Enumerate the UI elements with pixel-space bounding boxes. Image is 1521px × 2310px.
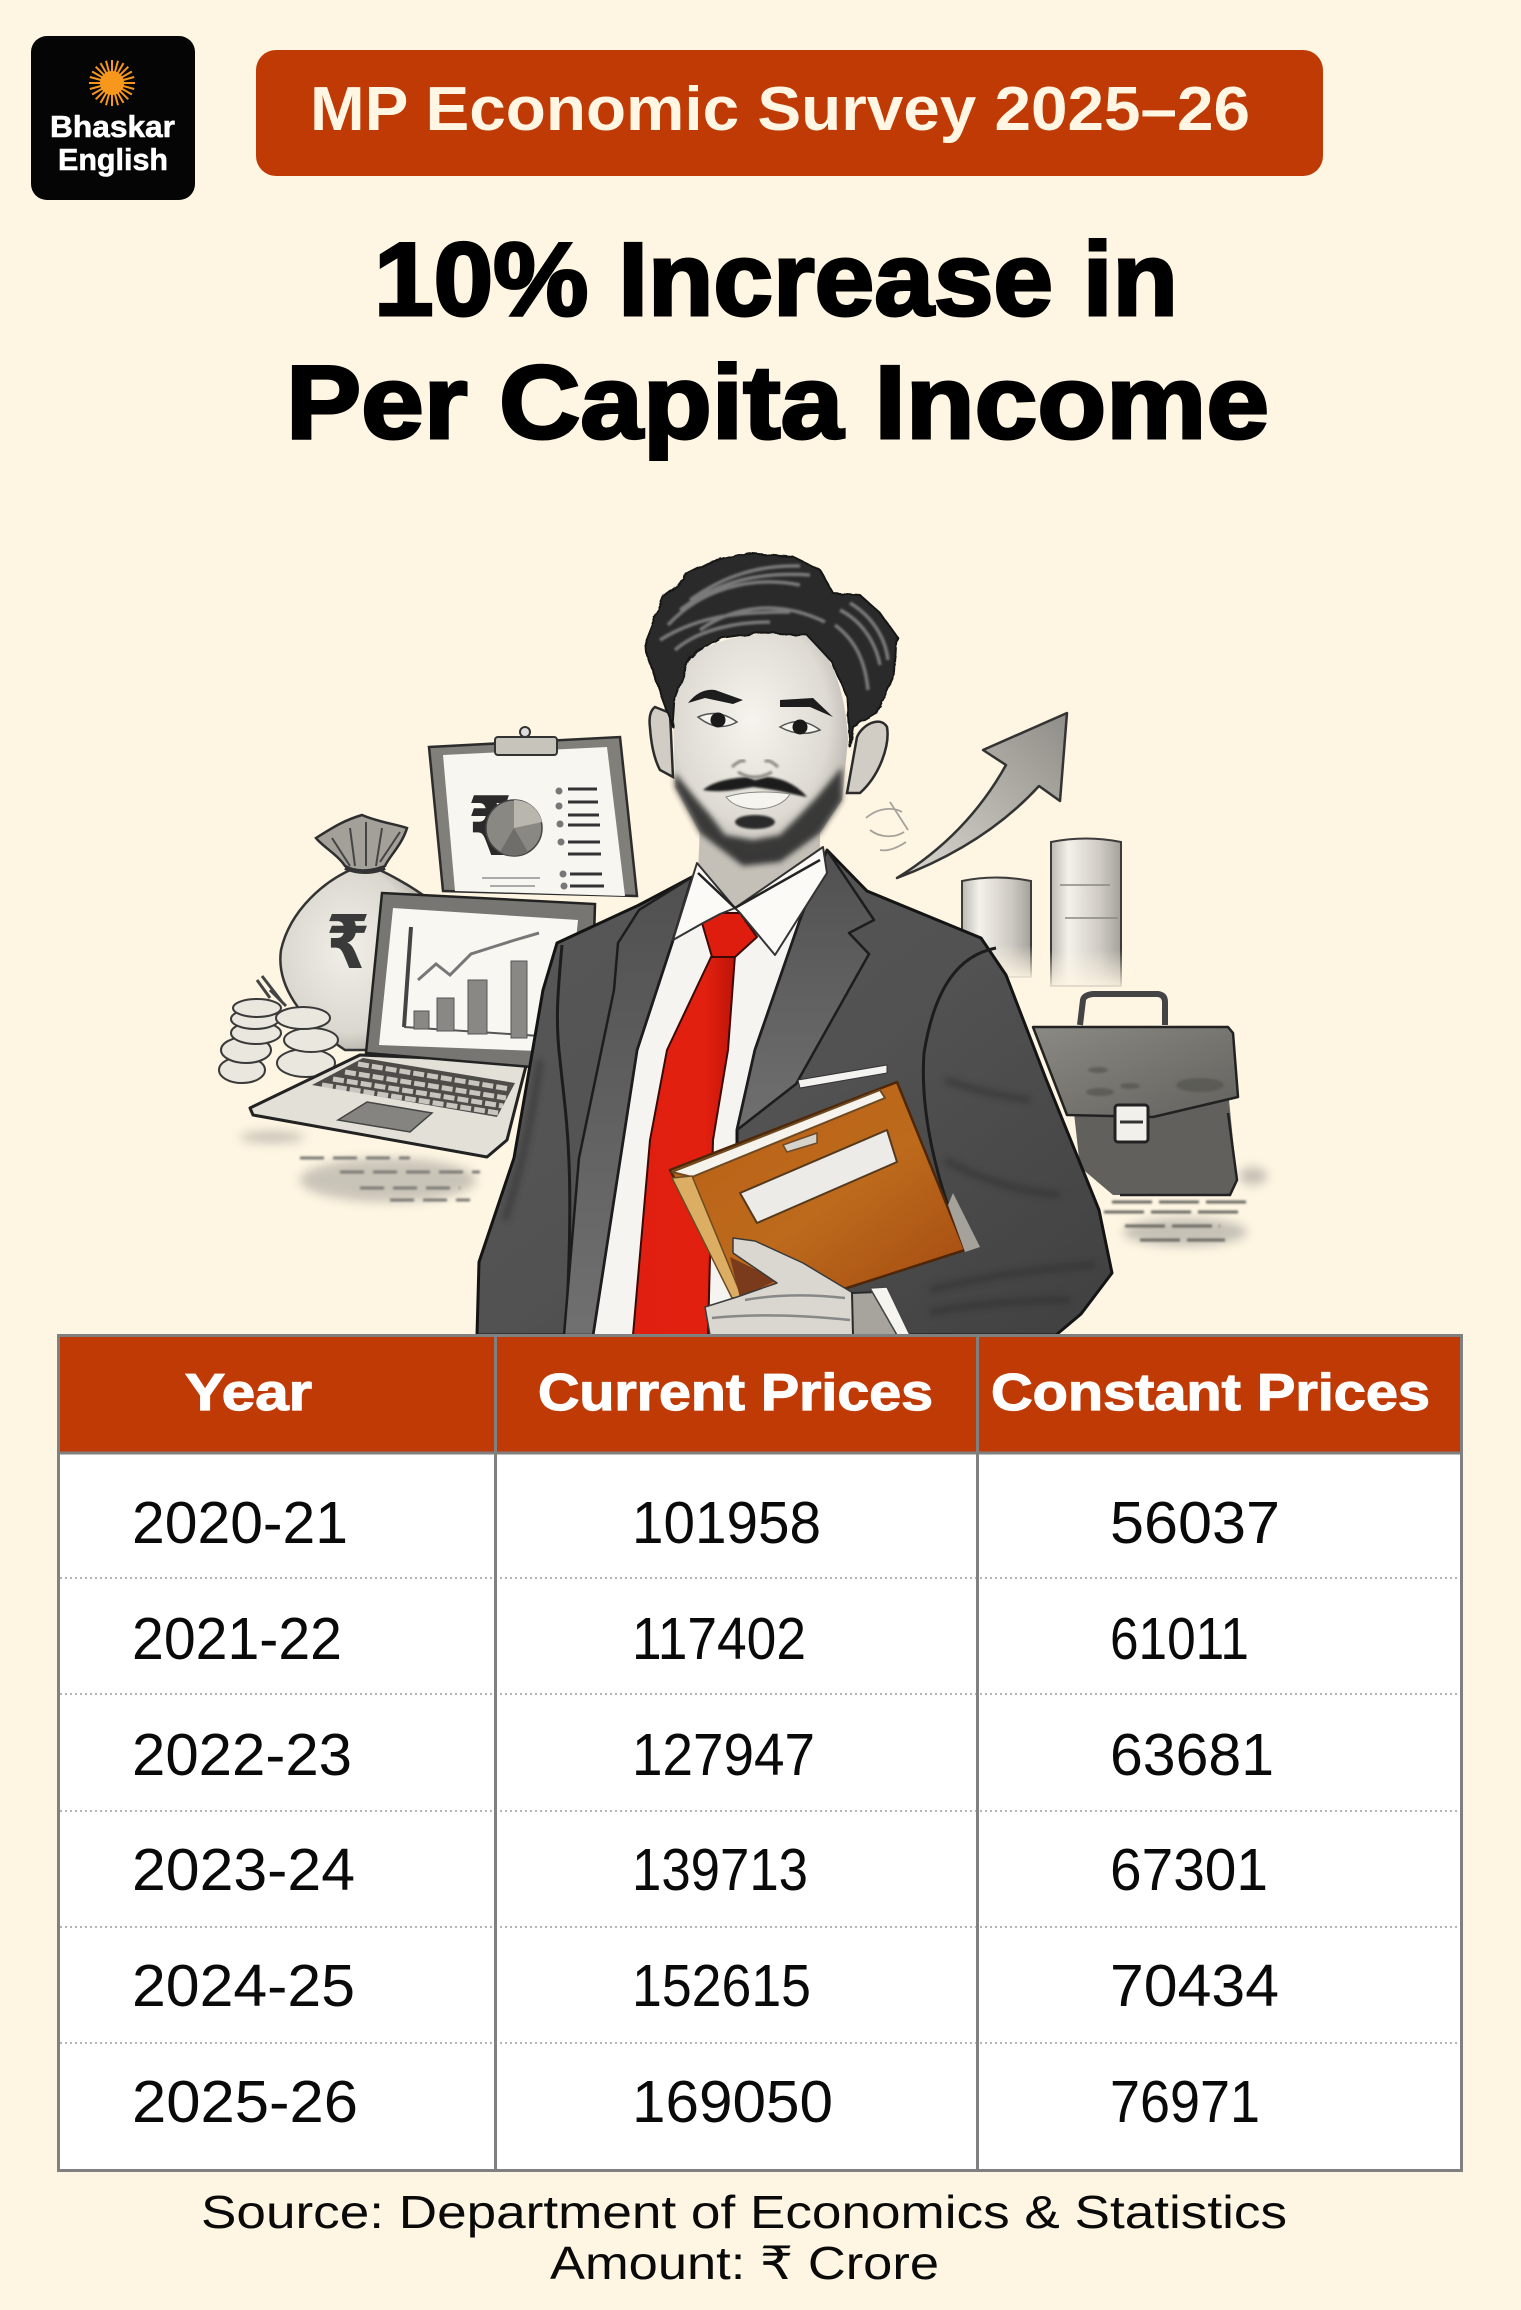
row 2022-23: 127947 bbox=[632, 1722, 815, 1788]
beard bbox=[675, 767, 842, 866]
icon: bar cylinders bbox=[960, 838, 1123, 992]
tie bbox=[633, 913, 757, 1335]
hair bbox=[646, 553, 897, 747]
row 2025-26 bbox=[132, 2069, 1260, 2135]
row 2023-24: 2023-24 bbox=[132, 1837, 355, 1903]
row 2022-23: 2022-23 bbox=[132, 1722, 352, 1788]
row 2020-21 bbox=[132, 1490, 1280, 1556]
icon: money bag bbox=[257, 815, 430, 1050]
row 2020-21: 101958 bbox=[632, 1490, 821, 1556]
table header row: Current Prices bbox=[538, 1364, 933, 1422]
row 2025-26: 76971 bbox=[1110, 2069, 1260, 2135]
table header row bbox=[58, 1335, 1462, 1452]
icon: clipboard with pie chart: ₹ bbox=[468, 782, 512, 873]
row 2021-22: 2021-22 bbox=[132, 1606, 342, 1672]
hair strands bbox=[660, 566, 888, 690]
source note bbox=[201, 2186, 1287, 2289]
row 2025-26: 2025-26 bbox=[132, 2069, 358, 2135]
right lapel bbox=[737, 850, 874, 1130]
pocket square bbox=[798, 1065, 887, 1088]
hand bbox=[705, 1238, 853, 1335]
row 2023-24: 139713 bbox=[632, 1837, 808, 1903]
title: 10% Increase in bbox=[374, 222, 1178, 338]
icon: briefcase bbox=[1033, 994, 1238, 1195]
source note: Amount: ₹ Crore bbox=[550, 2237, 939, 2289]
logo wordmark: Bhaskar bbox=[50, 109, 175, 144]
row 2024-25 bbox=[132, 1953, 1279, 2019]
header pill: MP Economic Survey 2025-26 bbox=[256, 50, 1323, 176]
table header row: Year bbox=[185, 1364, 312, 1422]
row 2023-24: 67301 bbox=[1110, 1837, 1268, 1903]
logo wordmark: English bbox=[58, 142, 168, 177]
icon: coin stacks bbox=[219, 999, 338, 1083]
icon: laptop with chart bbox=[250, 893, 595, 1157]
row 2021-22 bbox=[132, 1606, 1249, 1672]
sleeve creases bbox=[557, 945, 996, 1330]
book bbox=[670, 1082, 980, 1298]
laptop shadow bbox=[240, 1131, 480, 1202]
title: Per Capita Income bbox=[286, 345, 1269, 461]
row 2021-22: 117402 bbox=[632, 1606, 806, 1672]
row 2020-21: 56037 bbox=[1110, 1490, 1280, 1556]
left lapel bbox=[564, 877, 692, 1335]
icon: growth arrow bbox=[897, 713, 1067, 878]
neck line bbox=[698, 860, 820, 908]
title bbox=[286, 222, 1269, 461]
eyes and brows bbox=[688, 690, 833, 777]
bag twine scribble bbox=[257, 976, 286, 1006]
face bbox=[673, 633, 848, 863]
row 2020-21: 2020-21 bbox=[132, 1490, 348, 1556]
row 2021-22: 61011 bbox=[1110, 1606, 1249, 1672]
row 2022-23: 63681 bbox=[1110, 1722, 1274, 1788]
table body panel bbox=[58, 1335, 1462, 2171]
table header row: Constant Prices bbox=[991, 1364, 1430, 1422]
icon: clipboard with pie chart bbox=[429, 727, 637, 896]
row 2022-23 bbox=[132, 1722, 1274, 1788]
logo wordmark bbox=[50, 109, 175, 177]
source note: Source: Department of Economics & Statistics bbox=[201, 2186, 1287, 2238]
table bbox=[58, 1335, 1462, 2171]
briefcase shadow bbox=[1104, 1167, 1267, 1246]
jacket shading bbox=[505, 1060, 1095, 1312]
neck bbox=[698, 825, 820, 908]
row 2025-26: 169050 bbox=[632, 2069, 833, 2135]
header pill: MP Economic Survey 2025-26: MP Economic Survey 2025–26 bbox=[310, 75, 1250, 144]
row 2024-25: 70434 bbox=[1110, 1953, 1279, 2019]
icon: money bag: ₹ bbox=[326, 901, 370, 984]
watch bbox=[852, 1287, 910, 1335]
row 2024-25: 152615 bbox=[632, 1953, 811, 2019]
jacket bbox=[477, 850, 1112, 1335]
row 2024-25: 2024-25 bbox=[132, 1953, 355, 2019]
figure: man in suit bbox=[477, 553, 1112, 1340]
sketch scribble bbox=[866, 802, 908, 850]
mouth and moustache bbox=[703, 777, 807, 829]
icon: sun burst bbox=[89, 60, 135, 106]
shirt bbox=[590, 847, 827, 1340]
collar bbox=[673, 847, 827, 955]
ears bbox=[650, 707, 888, 793]
row 2023-24 bbox=[132, 1837, 1268, 1903]
illustration: businessman with finance objects bbox=[219, 553, 1267, 1340]
logo: Bhaskar English bbox=[31, 36, 195, 200]
